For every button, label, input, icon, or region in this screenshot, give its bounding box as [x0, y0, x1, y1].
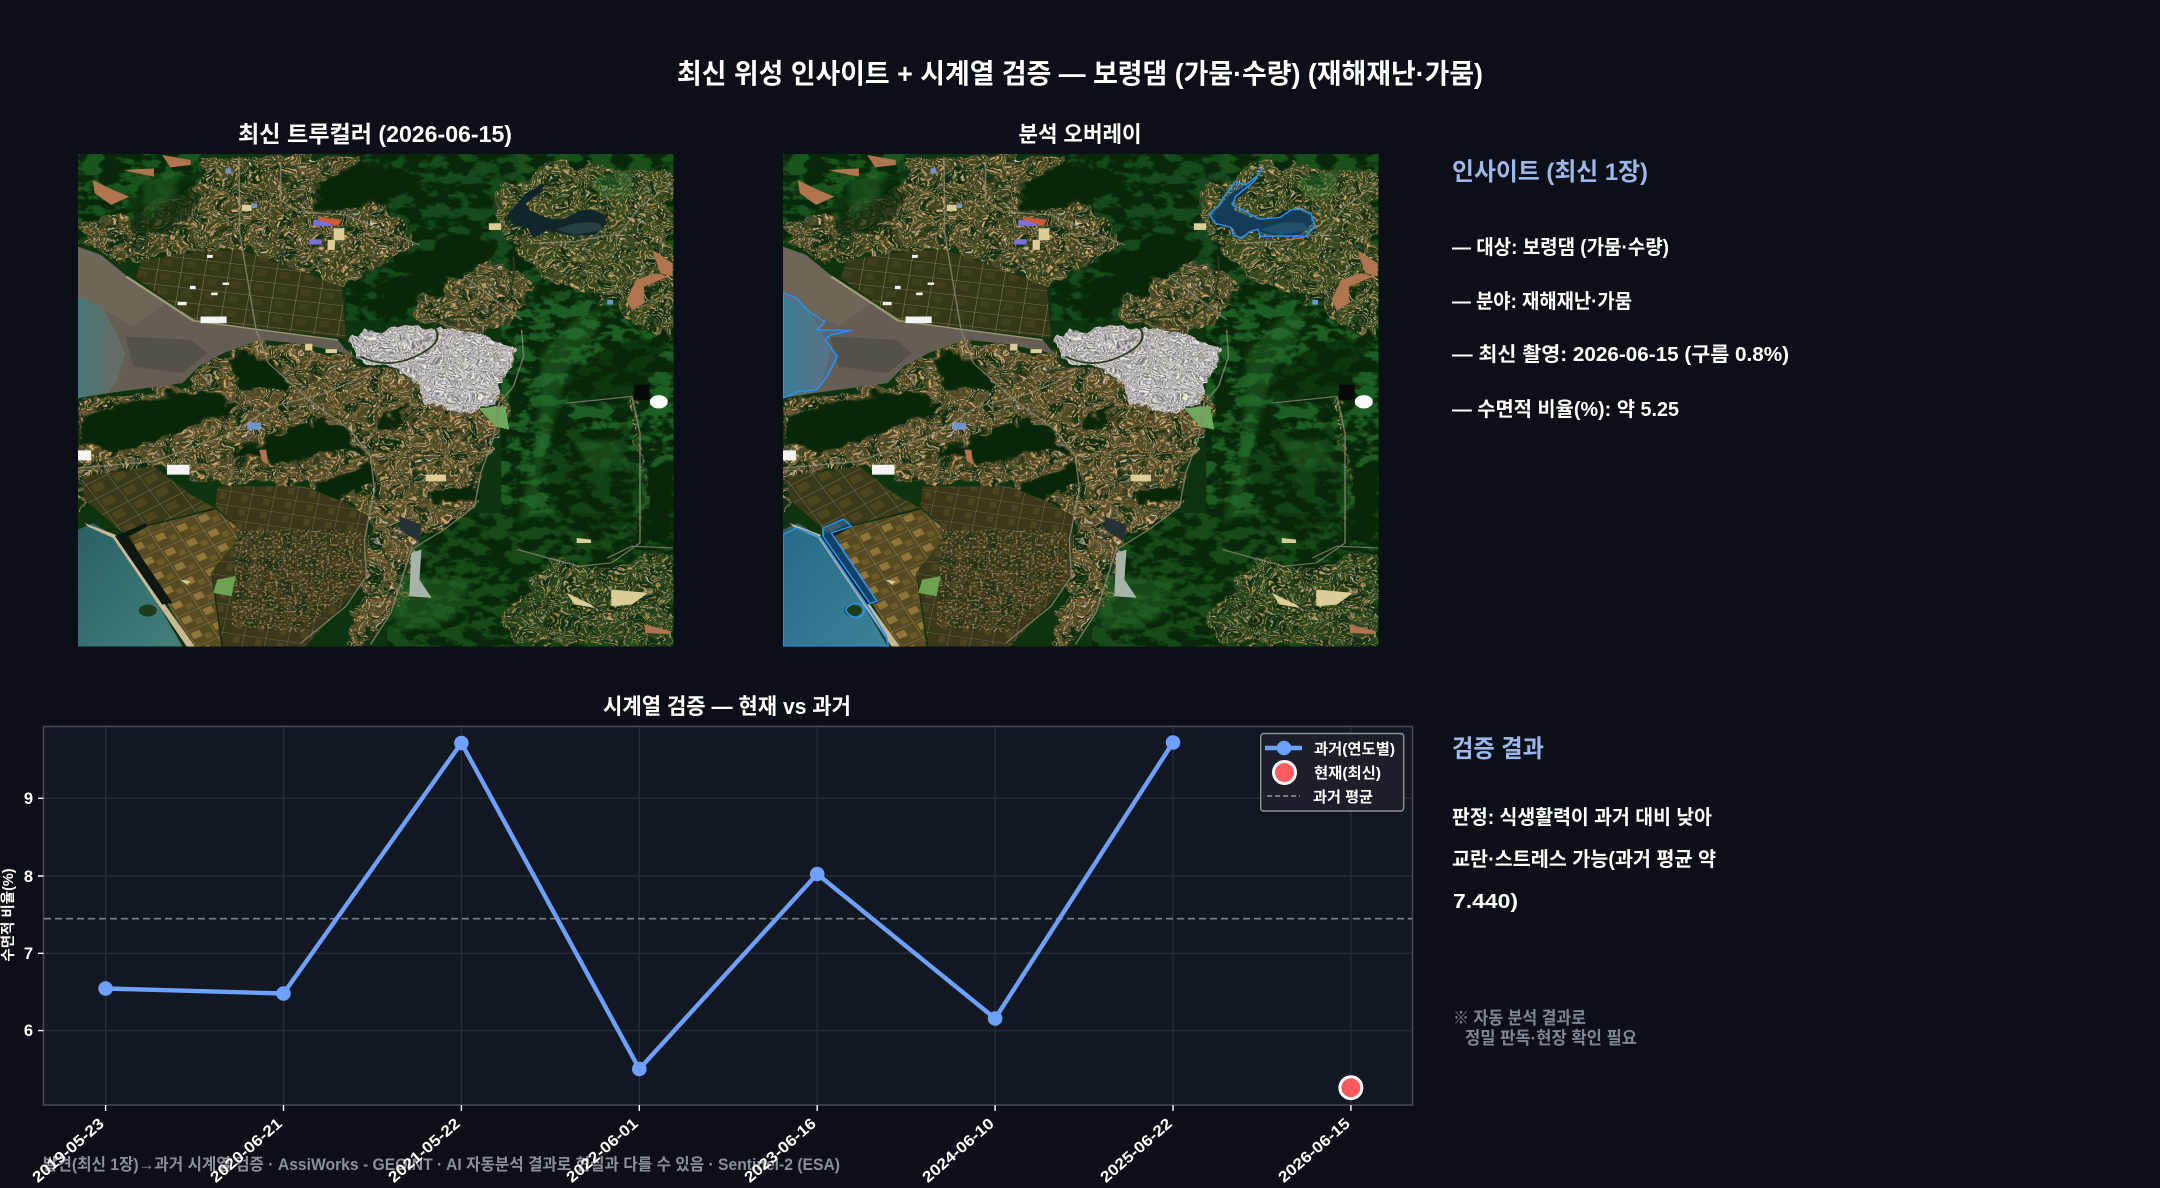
x axis dates: 2024-06-10: [919, 1115, 998, 1186]
verdict text: 7.440): [1453, 891, 1518, 913]
x axis dates: 2023-06-16: [741, 1115, 820, 1186]
x axis dates: 2026-06-15: [1275, 1115, 1354, 1186]
current point: [1340, 1077, 1362, 1099]
x axis dates: 2021-05-22: [385, 1115, 464, 1186]
verification panel: [1452, 735, 1716, 1048]
legend: 현재(최신): [1314, 765, 1381, 782]
x axis dates: 2020-06-21: [207, 1115, 286, 1186]
insight heading: 인사이트 (최신 1장): [1452, 158, 1648, 186]
verdict text: 판정: 식생활력이 과거 대비 낮아: [1452, 806, 1712, 829]
insight panel: [1452, 158, 1789, 421]
disclaimer note: [1453, 1008, 1637, 1048]
y axis numbers: 7: [24, 945, 33, 963]
x axis dates: 2022-06-01: [563, 1115, 642, 1186]
y axis numbers: 9: [24, 790, 33, 808]
line chart: [0, 726, 1412, 1186]
disclaimer note: 정밀 판독·현장 확인 필요: [1465, 1028, 1637, 1048]
insight item: target: — 대상: 보령댐 (가뭄·수량): [1452, 236, 1669, 259]
insight item: latest capture: — 최신 촬영: 2026-06-15 (구름 0.8%): [1452, 343, 1789, 366]
legend: 과거(연도별): [1314, 741, 1395, 758]
chart heading: 시계열 검증 — 현재 vs 과거: [603, 694, 851, 719]
legend: 과거 평균: [1313, 789, 1373, 806]
verdict text: [1452, 806, 1716, 913]
verdict text: 교란·스트레스 가능(과거 평균 약: [1452, 848, 1716, 871]
footer note: 발견(최신 1장)→과거 시계열 검증 · AssiWorks - GEOINT · AI 자동분석 결과로 현실과 다를 수 있음 · Sentinel-2 (ESA): [43, 1155, 840, 1174]
y axis numbers: 6: [24, 1022, 33, 1040]
x axis dates: 2025-06-22: [1097, 1115, 1176, 1186]
insight item: water ratio: — 수면적 비율(%): 약 5.25: [1452, 398, 1679, 421]
satellite image: true color: [78, 154, 674, 646]
heading: true color map: 최신 트루컬러 (2026-06-15): [238, 121, 512, 147]
x axis dates: [29, 1115, 1354, 1186]
disclaimer note: ※ 자동 분석 결과로: [1453, 1008, 1586, 1028]
water overlay polygons: [783, 168, 1315, 646]
satellite image: analysis overlay: [783, 154, 1378, 898]
historical average line: [44, 918, 1412, 920]
y axis label: 수면적 비율(%): [0, 868, 17, 962]
verification heading: 검증 결과: [1452, 735, 1544, 763]
series: past by year: [98, 735, 1180, 1076]
x axis dates: 2019-05-23: [29, 1115, 108, 1186]
legend: [1261, 734, 1404, 811]
heading: analysis overlay: 분석 오버레이: [1018, 122, 1142, 147]
y axis numbers: 8: [24, 868, 33, 886]
y axis numbers: [24, 790, 33, 1040]
title: 최신 위성 인사이트 + 시계열 검증 — 보령댐 (가뭄·수량) (재해재난·가뭄): [677, 58, 1483, 89]
insight item: field: — 분야: 재해재난·가뭄: [1452, 290, 1632, 313]
